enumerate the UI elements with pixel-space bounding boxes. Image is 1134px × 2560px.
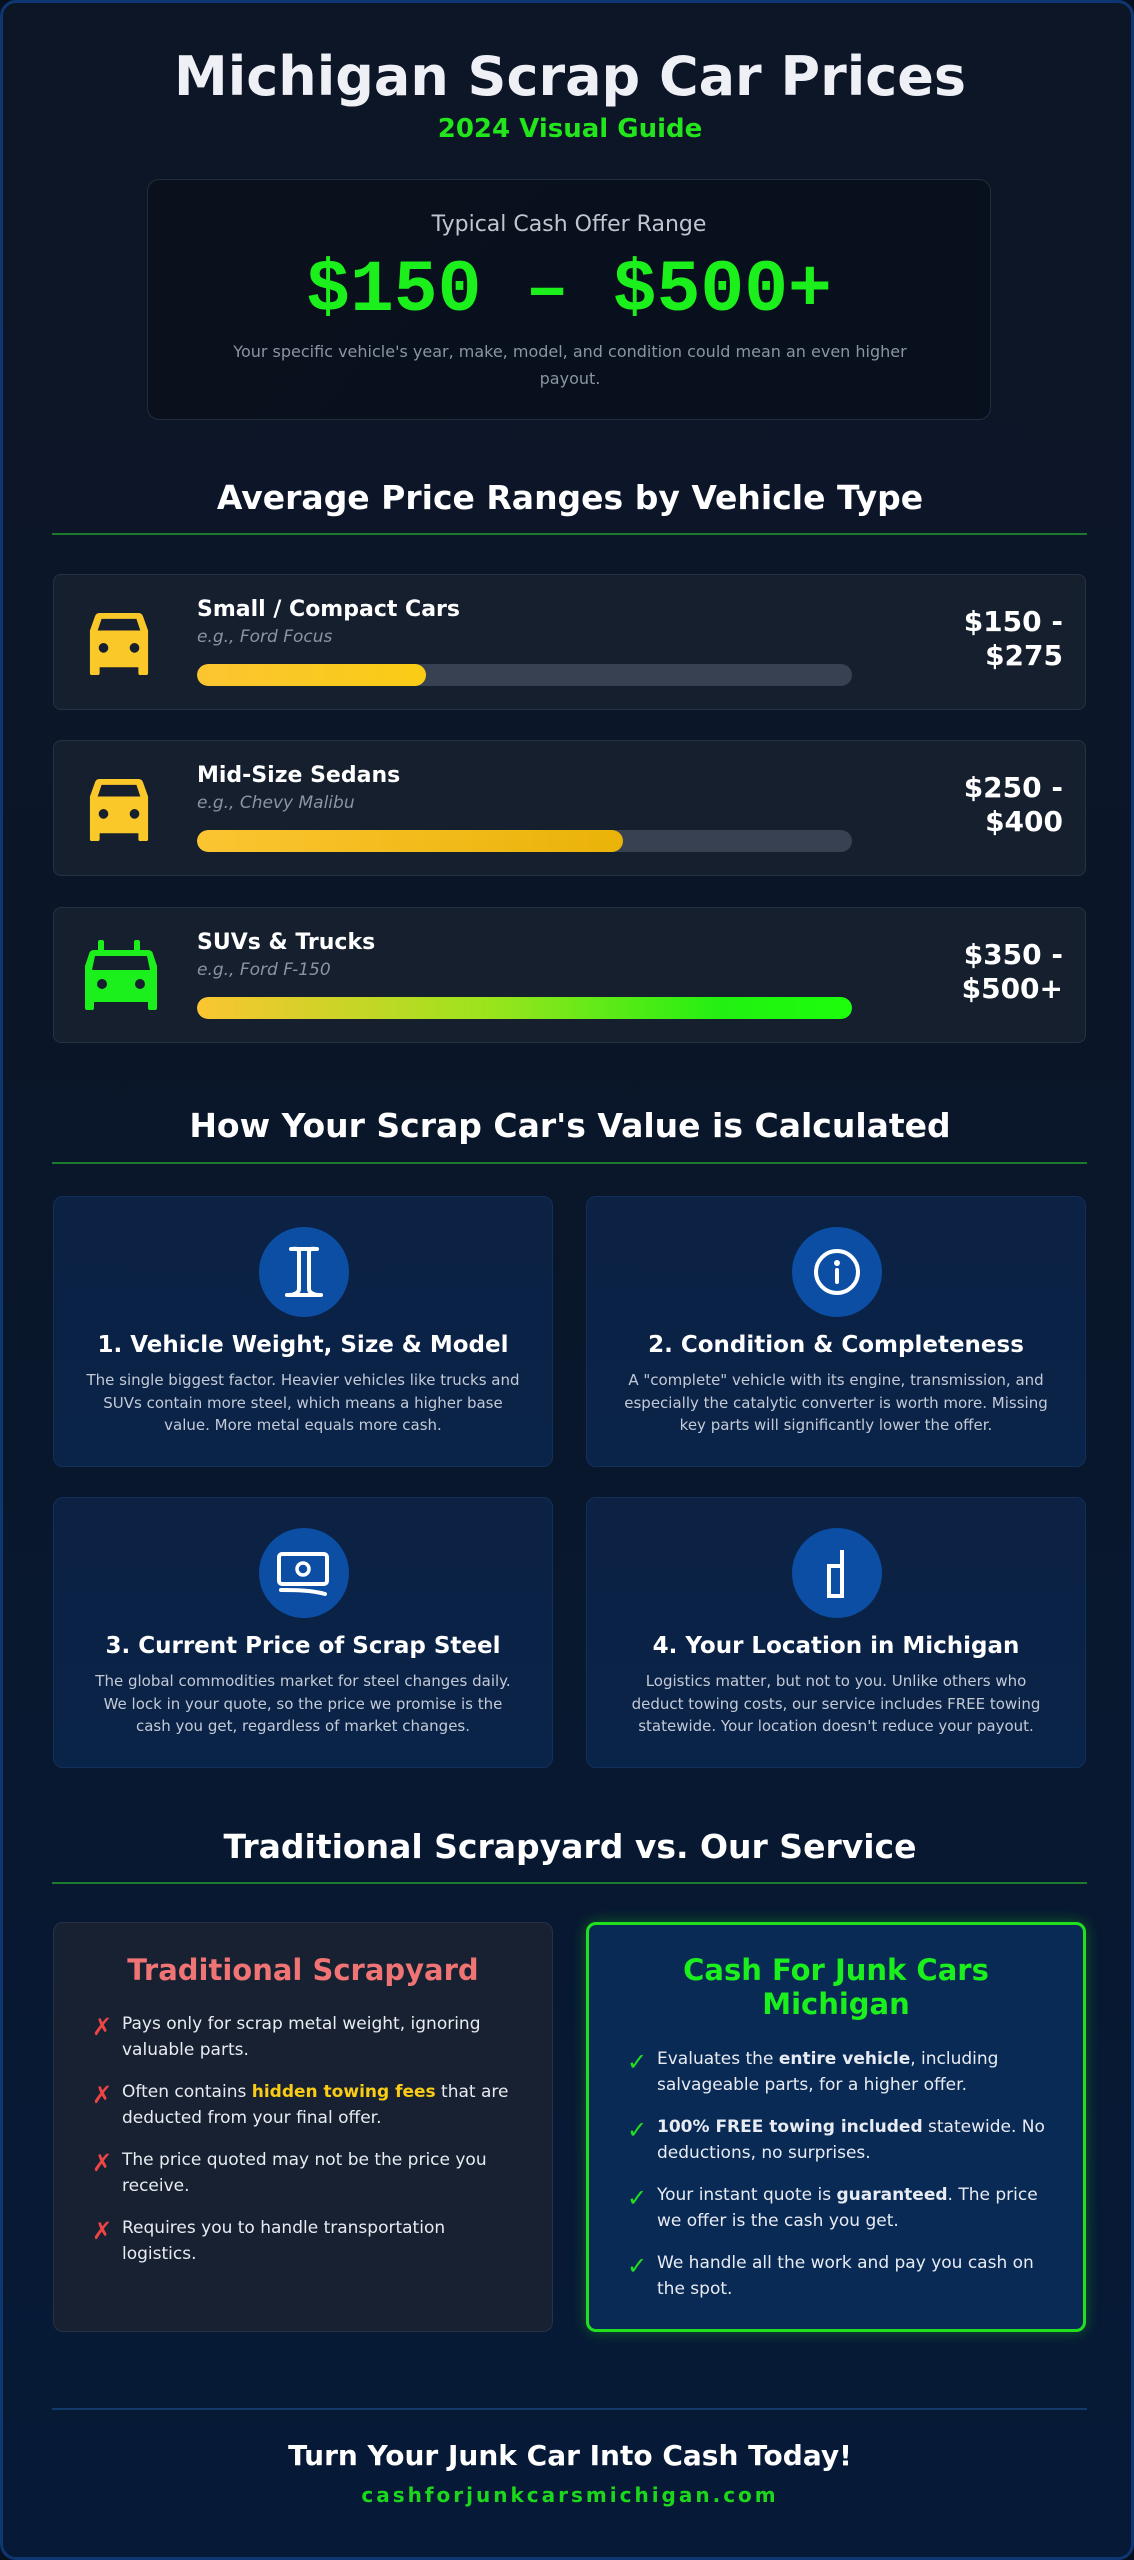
card: mid-size: e.g., Chevy Malibu [197, 793, 355, 813]
card: mid-size: Mid-Size Sedans [197, 763, 400, 788]
item: the spot. [657, 2279, 732, 2299]
card: SUVs: e.g., Ford F-150 [197, 960, 331, 980]
item: deductions, no surprises. [657, 2143, 871, 2163]
factor card 2 [586, 1196, 1086, 1467]
heading: comparison: Traditional Scrapyard vs. Our Service [223, 1827, 917, 1866]
item: valuable parts. [122, 2040, 249, 2060]
factor card 3: We lock in your quote, so the price we promise is the [104, 1694, 502, 1712]
item [627, 2116, 1045, 2163]
heading: value factors: How Your Scrap Car's Value is Calculated [189, 1106, 951, 1145]
hero panel: typical cash offer [147, 179, 991, 420]
factor card 3: cash you get, regardless of market changes. [136, 1717, 470, 1735]
bar [197, 997, 852, 1019]
item: deducted from your final offer. [122, 2108, 382, 2128]
icon: info [792, 1227, 882, 1317]
factor card 2: key parts will significantly lower the offer. [680, 1416, 992, 1434]
panel: traditional scrapyard: ✗ [92, 2013, 112, 2041]
price [964, 605, 1063, 672]
item: salvageable parts, for a higher offer. [657, 2075, 967, 2095]
factor card 2: A "complete" vehicle with its engine, transmission, and [628, 1371, 1044, 1389]
bar [197, 830, 852, 852]
factor card 4: deduct towing costs, our service includes FREE towing [632, 1694, 1040, 1712]
item: Evaluates the entire vehicle, including [657, 2049, 998, 2069]
item: We handle all the work and pay you cash on [657, 2253, 1034, 2273]
icon: weight [259, 1227, 349, 1317]
card: small cars [53, 574, 1086, 710]
panel: our service: ✓ [627, 2184, 647, 2212]
icon: cash [259, 1528, 349, 1618]
price: $250 - [964, 771, 1063, 804]
factor card 4: Logistics matter, but not to you. Unlike others who [646, 1672, 1026, 1690]
item [92, 2149, 487, 2196]
item: Requires you to handle transportation [122, 2218, 445, 2238]
factor card 1: 1. Vehicle Weight, Size & Model [97, 1332, 509, 1358]
hero note: Your specific vehicle's year, make, model, and condition could mean an even higher payout. [233, 342, 907, 388]
item: we offer is the cash you get. [657, 2211, 899, 2231]
panel: our service [586, 1922, 1086, 2332]
card: small cars: e.g., Ford Focus [197, 627, 332, 647]
title: Michigan Scrap Car Prices [174, 45, 966, 108]
factor card 4: statewide. Your location doesn't reduce your payout. [638, 1717, 1034, 1735]
icon: car [90, 613, 148, 675]
price: $400 [985, 805, 1063, 838]
card: small cars: Small / Compact Cars [197, 597, 460, 622]
factor card 1 [53, 1196, 553, 1467]
panel: traditional scrapyard: ✗ [92, 2081, 112, 2109]
price: $350 - [964, 938, 1063, 971]
card: mid-size [53, 740, 1086, 876]
item: Your instant quote is guaranteed. The price [657, 2185, 1038, 2205]
hero label: Typical Cash Offer Range [432, 212, 706, 237]
factor card 3 [53, 1497, 553, 1768]
panel: traditional scrapyard [53, 1922, 553, 2332]
price [964, 771, 1063, 838]
price: $275 [985, 639, 1063, 672]
factor card 4 [586, 1497, 1086, 1768]
item [627, 2184, 1038, 2231]
footer call to action: Turn Your Junk Car Into Cash Today! [288, 2439, 852, 2472]
factor card 4: 4. Your Location in Michigan [653, 1633, 1019, 1659]
item [92, 2013, 480, 2060]
heading: price ranges: Average Price Ranges by Vehicle Type [217, 478, 923, 517]
item [92, 2081, 508, 2128]
factor card 3: The global commodities market for steel changes daily. [95, 1672, 511, 1690]
hero price range: $150 – $500+ [306, 249, 832, 332]
factor card 1: value. More metal equals more cash. [164, 1416, 442, 1434]
factor card 3: 3. Current Price of Scrap Steel [106, 1633, 500, 1659]
item: receive. [122, 2176, 190, 2196]
icon: truck [85, 940, 157, 1010]
item [627, 2252, 1034, 2299]
item: logistics. [122, 2244, 196, 2264]
panel: traditional scrapyard: Traditional Scrapyard [127, 1953, 479, 1987]
footer url: cashforjunkcarsmichigan.com [361, 2483, 779, 2507]
factor card 2: 2. Condition & Completeness [648, 1332, 1024, 1358]
card: SUVs [53, 907, 1086, 1043]
item [627, 2048, 998, 2095]
price: $150 - [964, 605, 1063, 638]
factor card 1: The single biggest factor. Heavier vehicles like trucks and [86, 1371, 520, 1389]
icon: car [90, 779, 148, 841]
panel: our service: ✓ [627, 2252, 647, 2280]
factor card 1: SUVs contain more steel, which means a higher base [103, 1394, 503, 1412]
item: Pays only for scrap metal weight, ignoring [122, 2014, 480, 2034]
item: Often contains hidden towing fees that are [122, 2082, 508, 2102]
factor card 2: especially the catalytic converter is worth more. Missing [624, 1394, 1048, 1412]
panel: our service: Cash For Junk Cars [683, 1953, 989, 1987]
icon: location [792, 1528, 882, 1618]
panel: traditional scrapyard: ✗ [92, 2217, 112, 2245]
panel: our service: ✓ [627, 2048, 647, 2076]
price: $500+ [962, 972, 1063, 1005]
panel: our service: Michigan [762, 1987, 910, 2021]
item: 100% FREE towing included statewide. No [657, 2117, 1045, 2137]
panel: traditional scrapyard: ✗ [92, 2149, 112, 2177]
panel: our service: ✓ [627, 2116, 647, 2144]
bar [197, 664, 852, 686]
subtitle: 2024 Visual Guide [438, 114, 702, 144]
price [962, 938, 1063, 1005]
item [92, 2217, 445, 2264]
item: The price quoted may not be the price you [122, 2150, 487, 2170]
card: SUVs: SUVs & Trucks [197, 930, 375, 955]
